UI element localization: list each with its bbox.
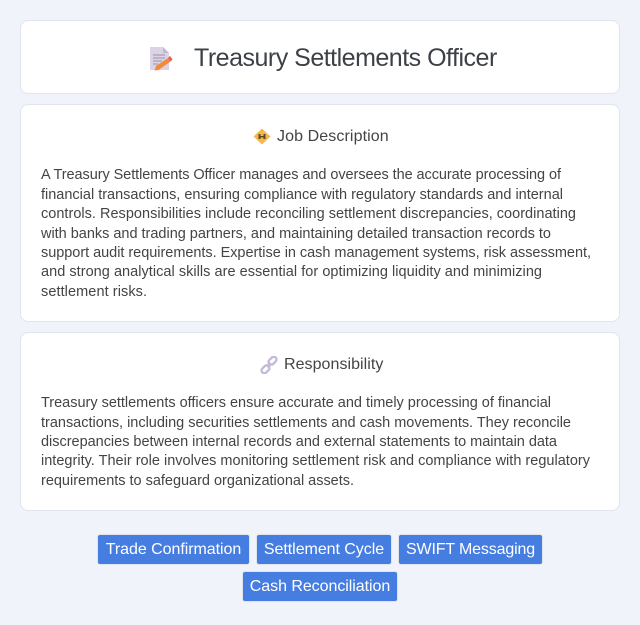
text: job description: [40, 167, 591, 300]
text: job description: and strong analytical skills are essential for optimizing liquidity and minimizing: [41, 264, 542, 280]
panel: job description: [20, 104, 620, 322]
text: responsibility: discrepancies between internal records and external statements to maintain data: [41, 434, 558, 450]
text: job description: financial transactions, ensuring compliance with regulatory standards and internal: [41, 187, 563, 203]
tag: trade confirmation: [97, 534, 250, 565]
tag: cash reconciliation: [242, 571, 398, 602]
tag: trade confirmation: Trade Confirmation: [106, 541, 241, 558]
title: Treasury Settlements Officer: [194, 44, 497, 72]
icon: chain link: [260, 356, 278, 374]
tag: swift messaging: [398, 534, 543, 565]
heading: job description: Job Description: [277, 128, 389, 145]
icon: diamond sign: [254, 128, 270, 144]
text: responsibility: [41, 395, 591, 489]
heading: responsibility: Responsibility: [284, 356, 383, 373]
text: job description: A Treasury Settlements Officer manages and oversees the accurate processing of: [41, 167, 562, 183]
text: job description: support audit requirements. Expertise in cash management systems, risk assessment,: [41, 245, 591, 261]
text: job description: with banks and trading partners, and maintaining detailed transaction records to: [40, 226, 551, 242]
text: responsibility: requirements to safeguard organizational assets.: [41, 473, 354, 489]
icon: document with pencil: [150, 47, 172, 70]
text: job description: settlement risks.: [41, 284, 147, 300]
text: responsibility: transactions, including securities settlements and cash movements. They reconcile: [41, 415, 571, 431]
tag: settlement cycle: Settlement Cycle: [264, 541, 384, 558]
panel: responsibility: [20, 332, 620, 511]
tag: cash reconciliation: Cash Reconciliation: [250, 578, 390, 595]
tag: settlement cycle: [256, 534, 392, 565]
title card: [20, 20, 620, 94]
text: responsibility: integrity. Their role involves monitoring settlement risk and compliance with regulatory: [41, 453, 591, 469]
tag: swift messaging: SWIFT Messaging: [406, 541, 535, 558]
text: job description: controls. Responsibilities include reconciling settlement discrepancies, coordinating: [41, 206, 576, 222]
text: responsibility: Treasury settlements officers ensure accurate and timely processing of financial: [41, 395, 551, 411]
